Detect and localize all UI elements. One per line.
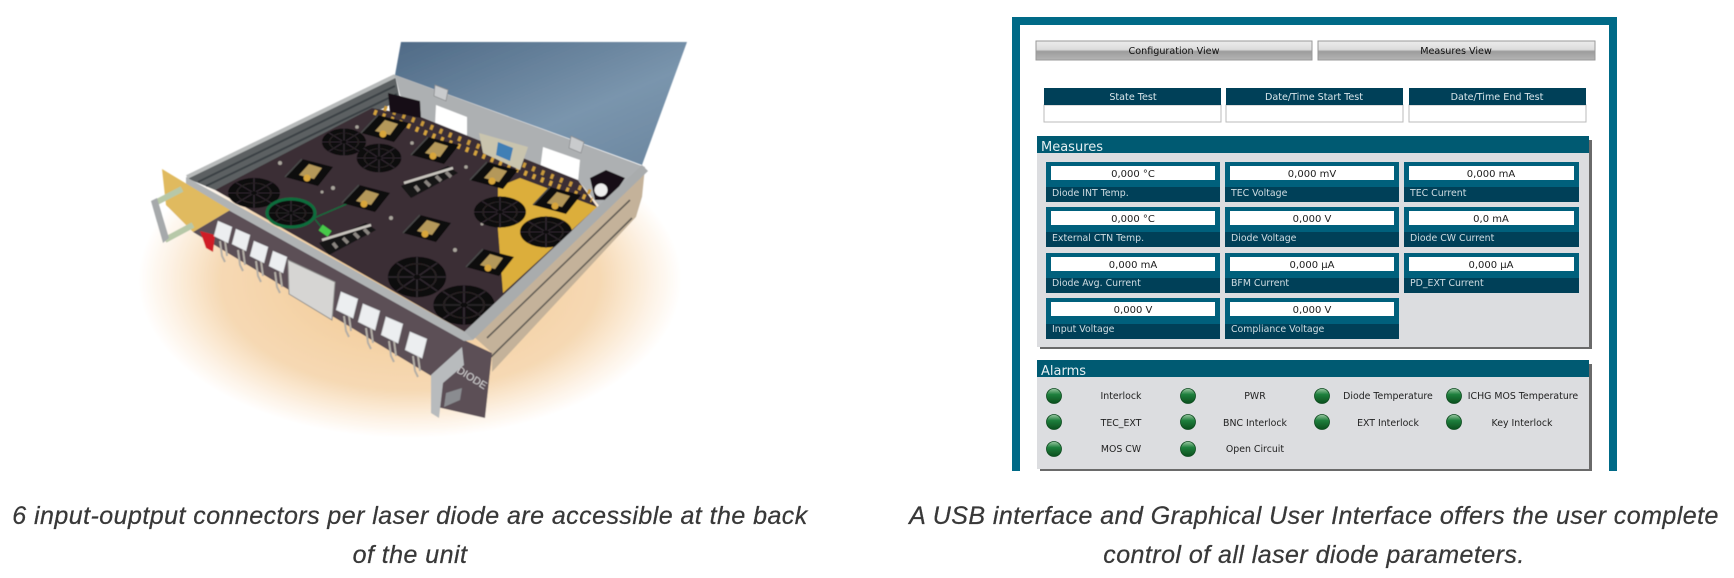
measure cells: 0,000 mA [1467, 169, 1515, 180]
test state headers: Date/Time Start Test [1265, 92, 1363, 103]
photo: laser diode driver unit [138, 42, 687, 438]
hinges [434, 85, 584, 153]
front top rail [186, 177, 473, 341]
open lid [395, 42, 687, 165]
rear fans [388, 93, 625, 200]
alarm labels: Diode Temperature [1343, 391, 1433, 402]
measure cells: TEC Current [1409, 188, 1467, 199]
test state headers: Date/Time End Test [1451, 92, 1544, 103]
panel: measures: Measures [1041, 140, 1103, 155]
measure cells: 0,000 °C [1111, 214, 1155, 225]
test state headers [1044, 88, 1586, 122]
panel: alarms: Alarms [1041, 364, 1086, 379]
caption left: of the unit [353, 541, 468, 569]
yellow PCB section [498, 178, 597, 293]
red switch [200, 231, 215, 252]
alarm labels: ICHG MOS Temperature [1468, 391, 1578, 402]
measure cells: Input Voltage [1052, 324, 1115, 335]
GUI screenshot [1012, 17, 1617, 477]
orange floor glow [138, 122, 682, 438]
measure cells: 0,000 °C [1111, 169, 1155, 180]
measure cells [1046, 162, 1579, 339]
connector block [479, 133, 528, 170]
measure cells: 0,000 V [1114, 305, 1152, 316]
window right [540, 147, 580, 182]
measure cells: Diode Avg. Current [1052, 278, 1141, 289]
alarm labels: MOS CW [1101, 444, 1141, 455]
view buttons [1036, 41, 1595, 60]
measure cells: BFM Current [1231, 278, 1289, 289]
front panel [193, 210, 492, 418]
alarm labels: TEC_EXT [1100, 418, 1142, 429]
view buttons: Measures View [1420, 46, 1492, 57]
measure cells: 0,000 µA [1289, 260, 1335, 271]
top silver rail right [464, 165, 648, 340]
alarm labels: Open Circuit [1226, 444, 1284, 455]
panel: alarms [1037, 360, 1592, 471]
right side wall [472, 167, 645, 372]
window left [435, 105, 467, 137]
alarm labels: Interlock [1101, 391, 1142, 402]
measure cells: 0,000 V [1293, 305, 1331, 316]
measure cells: Compliance Voltage [1231, 324, 1325, 335]
measure cells: PD_EXT Current [1410, 278, 1484, 289]
dark base plate [215, 108, 597, 332]
connectors and cables [214, 221, 427, 377]
measure cells: Diode INT Temp. [1052, 188, 1129, 199]
board holes [278, 125, 484, 252]
black fans [228, 128, 572, 325]
measure cells: Diode CW Current [1410, 233, 1495, 244]
measure cells: Diode Voltage [1231, 233, 1297, 244]
test state headers: State Test [1109, 92, 1157, 103]
measure cells: 0,000 µA [1468, 260, 1514, 271]
silver display plate [288, 260, 335, 320]
green fibre connector [319, 225, 332, 237]
caption left: 6 input-ouptput connectors per laser diode are accessible at the back [12, 502, 809, 530]
measure cells: 0,000 mV [1288, 169, 1336, 180]
alarm labels: Key Interlock [1492, 418, 1553, 429]
left handle [151, 189, 193, 243]
laser diode modules [285, 115, 581, 276]
window frame [1012, 17, 1617, 477]
green fibre coil [267, 199, 349, 233]
right handle [431, 347, 464, 418]
view buttons: Configuration View [1129, 46, 1220, 57]
measure cells: TEC Voltage [1230, 188, 1288, 199]
back wall [395, 75, 645, 207]
window interior [1020, 25, 1609, 475]
measure cells: 0,0 mA [1473, 214, 1509, 225]
brand label: DIODE [454, 364, 489, 392]
alarm labels [1100, 391, 1578, 455]
measure cells: 0,000 V [1293, 214, 1331, 225]
measure cells: External CTN Temp. [1052, 233, 1144, 244]
left inner rail [186, 75, 400, 190]
measure cells: 0,000 mA [1109, 260, 1157, 271]
crop mask below screenshot [1000, 471, 1734, 578]
alarm LEDs [1046, 388, 1462, 456]
caption right: control of all laser diode parameters. [1103, 541, 1525, 569]
alarm labels: BNC Interlock [1223, 418, 1288, 429]
caption right: A USB interface and Graphical User Interface offers the user complete [907, 502, 1719, 530]
gold connector rows [374, 112, 592, 200]
alarm labels: EXT Interlock [1357, 418, 1419, 429]
panel: measures [1037, 136, 1592, 349]
yellow ear [162, 169, 230, 232]
alarm labels: PWR [1244, 391, 1266, 402]
